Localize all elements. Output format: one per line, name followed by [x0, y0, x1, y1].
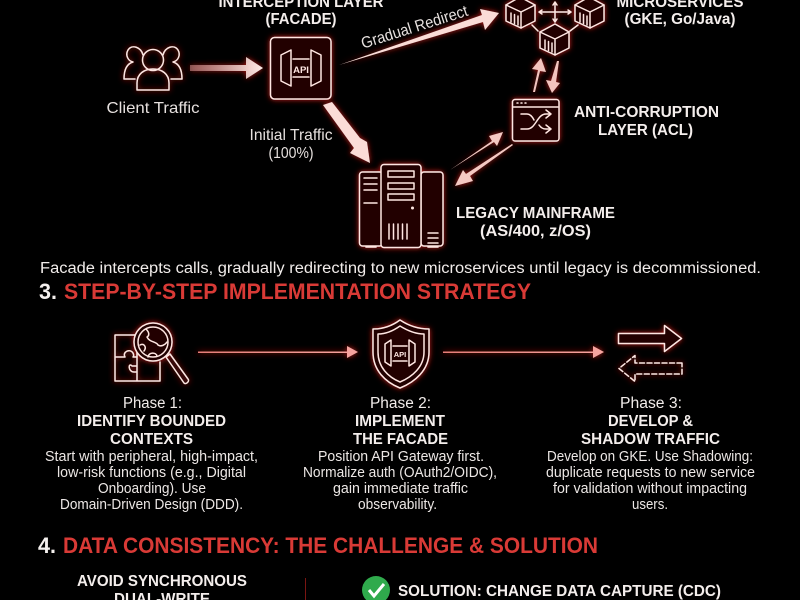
- heading: section 3: 3.: [39, 279, 57, 304]
- icon: API shield: API: [394, 350, 406, 359]
- text: phase 1: Start with peripheral, high-impact,: [45, 449, 258, 465]
- text: phase 2: [303, 395, 497, 513]
- text: phase 3: Phase 3:: [620, 395, 682, 412]
- heading: CDC solution: SOLUTION: CHANGE DATA CAPTURE (CDC): [398, 583, 721, 600]
- label: initial traffic: [250, 127, 332, 162]
- heading: interception layer: [218, 0, 384, 28]
- text: phase 3: duplicate requests to new service: [546, 465, 755, 481]
- text: phase 2: observability.: [358, 497, 437, 513]
- label: legacy mainframe: [456, 205, 615, 240]
- label: anti-corruption layer: ANTI-CORRUPTION: [574, 104, 719, 121]
- label: anti-corruption layer: LAYER (ACL): [598, 122, 693, 139]
- text: phase 3: DEVELOP &: [608, 413, 693, 430]
- label: legacy mainframe: LEGACY MAINFRAME: [456, 205, 615, 222]
- arrow: initial traffic to legacy: [323, 102, 370, 163]
- panel: implementation phases: [45, 320, 755, 513]
- text: phase 3: users.: [632, 497, 668, 513]
- label: initial traffic: Initial Traffic: [250, 127, 332, 144]
- text: phase 1: Domain-Driven Design (DDD).: [60, 497, 243, 513]
- text: phase 2: IMPLEMENT: [355, 413, 445, 430]
- icon: shadow traffic arrows: [618, 326, 682, 382]
- text: phase 1: CONTEXTS: [110, 431, 193, 448]
- heading: microservices: [616, 0, 744, 28]
- text: phase 2: Normalize auth (OAuth2/OIDC),: [303, 465, 497, 481]
- text: phase 1: low-risk functions (e.g., Digital: [57, 465, 246, 481]
- text: phase 3: [546, 395, 755, 513]
- heading: section 4: DATA CONSISTENCY: THE CHALLENGE & SOLUTION: [63, 533, 598, 558]
- icon: legacy mainframe: [360, 164, 443, 248]
- icon: API facade: API: [293, 65, 309, 76]
- caption: facade summary: Facade intercepts calls, gradually redirecting to new microservices until legacy is decommissioned.: [40, 260, 761, 277]
- text: phase 3: Develop on GKE. Use Shadowing:: [547, 449, 753, 465]
- label: legacy mainframe: (AS/400, z/OS): [480, 223, 591, 240]
- icon: API shield: [373, 320, 429, 388]
- section 2: facade architecture diagram: [106, 0, 744, 248]
- text: phase 3: SHADOW TRAFFIC: [581, 431, 720, 448]
- heading: microservices: (GKE, Go/Java): [624, 11, 736, 28]
- panel: avoid synchronous dual-write: AVOID SYNCHRONOUS: [77, 573, 247, 590]
- panel: avoid synchronous dual-write: [77, 573, 247, 600]
- arrow: ACL to legacy: [455, 144, 513, 186]
- icon: puzzle and magnifier: [115, 323, 189, 384]
- text: phase 1: [45, 395, 258, 513]
- text: phase 2: Phase 2:: [370, 395, 431, 412]
- arrow: legacy to ACL: [450, 132, 503, 170]
- text: phase 1: Onboarding). Use: [98, 481, 206, 497]
- icon: green check: [362, 576, 390, 600]
- icon: microservice cubes: [506, 0, 604, 55]
- arrow: client to facade: [190, 57, 263, 79]
- heading: section 4: 4.: [38, 533, 56, 558]
- heading: section 3: STEP-BY-STEP IMPLEMENTATION STRATEGY: [64, 279, 531, 304]
- arrow: phase 1 to phase 2: [198, 346, 358, 358]
- arrow: gradual redirect: [339, 9, 499, 65]
- text: phase 3: for validation without impacting: [553, 481, 747, 497]
- label: anti-corruption layer: [574, 104, 719, 139]
- label: client traffic: Client Traffic: [106, 100, 200, 117]
- text: phase 1: Phase 1:: [123, 395, 182, 412]
- icon: anti-corruption layer window: [512, 100, 559, 141]
- text: phase 2: gain immediate traffic: [333, 481, 468, 497]
- text: phase 1: IDENTIFY BOUNDED: [77, 413, 226, 430]
- label: gradual redirect: Gradual Redirect: [359, 3, 471, 53]
- arrow: microservices to ACL: [546, 61, 560, 93]
- arrow: phase 2 to phase 3: [443, 346, 604, 358]
- icon: API facade: [270, 38, 331, 99]
- icon: client traffic users: [124, 47, 182, 90]
- label: initial traffic: (100%): [268, 145, 314, 162]
- text: phase 2: THE FACADE: [353, 431, 448, 448]
- heading: interception layer: (FACADE): [266, 11, 336, 28]
- arrow: ACL to microservices: [532, 58, 546, 92]
- text: phase 2: Position API Gateway first.: [318, 449, 484, 465]
